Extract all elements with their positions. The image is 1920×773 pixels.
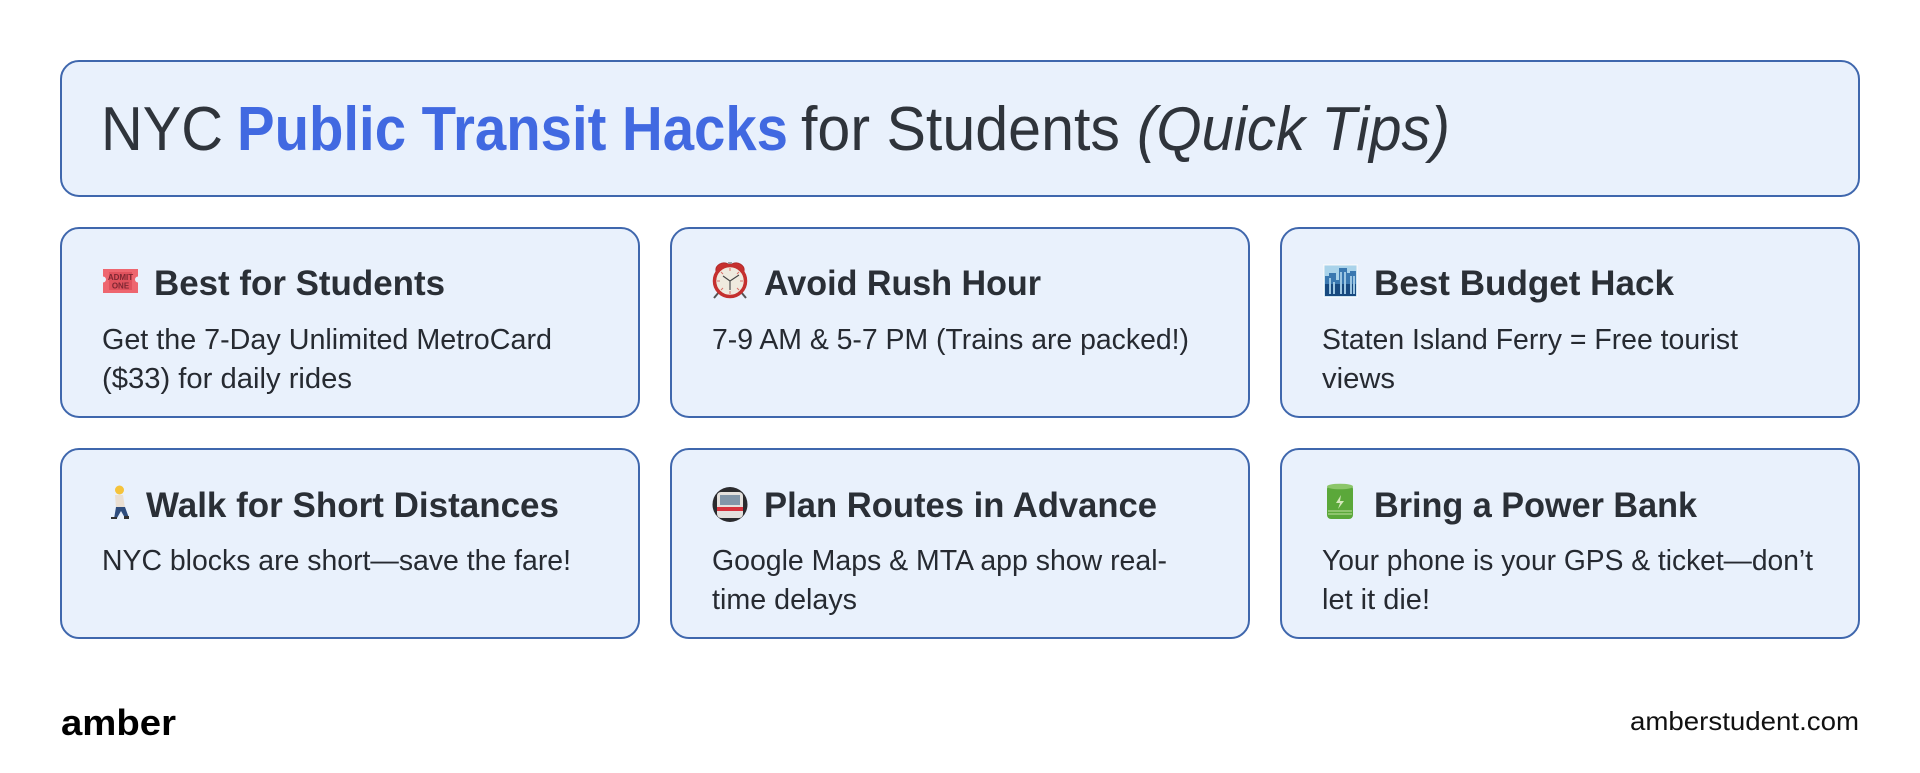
body text: Staten Island Ferry = Free tourist <box>1322 324 1738 356</box>
icon: ticket: ONE <box>112 282 130 290</box>
icon: ticket <box>103 269 138 293</box>
heading: Bring a Power Bank <box>1374 486 1698 525</box>
body text <box>712 545 1167 616</box>
panel: Bring a Power Bank <box>1281 449 1859 638</box>
icon: battery <box>1327 484 1353 519</box>
heading: Walk for Short Distances <box>146 486 559 525</box>
icon: walking person <box>111 486 129 519</box>
icon: cityscape <box>1323 264 1358 298</box>
body text: views <box>1322 363 1395 395</box>
panel: Best Budget Hack <box>1281 228 1859 417</box>
website url: amberstudent.com <box>1630 706 1859 736</box>
body text: Google Maps & MTA app show real- <box>712 545 1167 577</box>
title: Public Transit Hacks <box>237 95 788 164</box>
body text: Get the 7-Day Unlimited MetroCard <box>102 324 552 356</box>
panel: Walk for Short Distances <box>61 449 639 638</box>
title: NYC <box>101 95 223 164</box>
icon: metro train <box>712 487 748 522</box>
body text: let it die! <box>1322 584 1430 616</box>
title: for Students <box>801 95 1120 164</box>
body text <box>102 324 552 395</box>
title panel <box>61 61 1859 196</box>
title: (Quick Tips) <box>1137 95 1450 164</box>
body text <box>1322 545 1813 616</box>
panel: Best for Students <box>61 228 639 417</box>
heading: Best Budget Hack <box>1374 264 1675 303</box>
icon: alarm clock <box>714 262 746 298</box>
body text: ($33) for daily rides <box>102 363 352 395</box>
body text: time delays <box>712 584 857 616</box>
heading: Best for Students <box>154 264 445 303</box>
title <box>101 95 1450 164</box>
panel: Plan Routes in Advance <box>671 449 1249 638</box>
body text: Your phone is your GPS & ticket—don’t <box>1322 545 1813 577</box>
body text: 7-9 AM & 5-7 PM (Trains are packed!) <box>712 324 1189 356</box>
icon: ticket: ADMIT <box>108 273 133 282</box>
body text <box>1322 324 1738 395</box>
logo: amber: amber <box>61 702 176 743</box>
panel: Avoid Rush Hour <box>671 228 1249 417</box>
body text: NYC blocks are short—save the fare! <box>102 545 571 577</box>
heading: Plan Routes in Advance <box>764 486 1157 525</box>
heading: Avoid Rush Hour <box>764 264 1041 303</box>
